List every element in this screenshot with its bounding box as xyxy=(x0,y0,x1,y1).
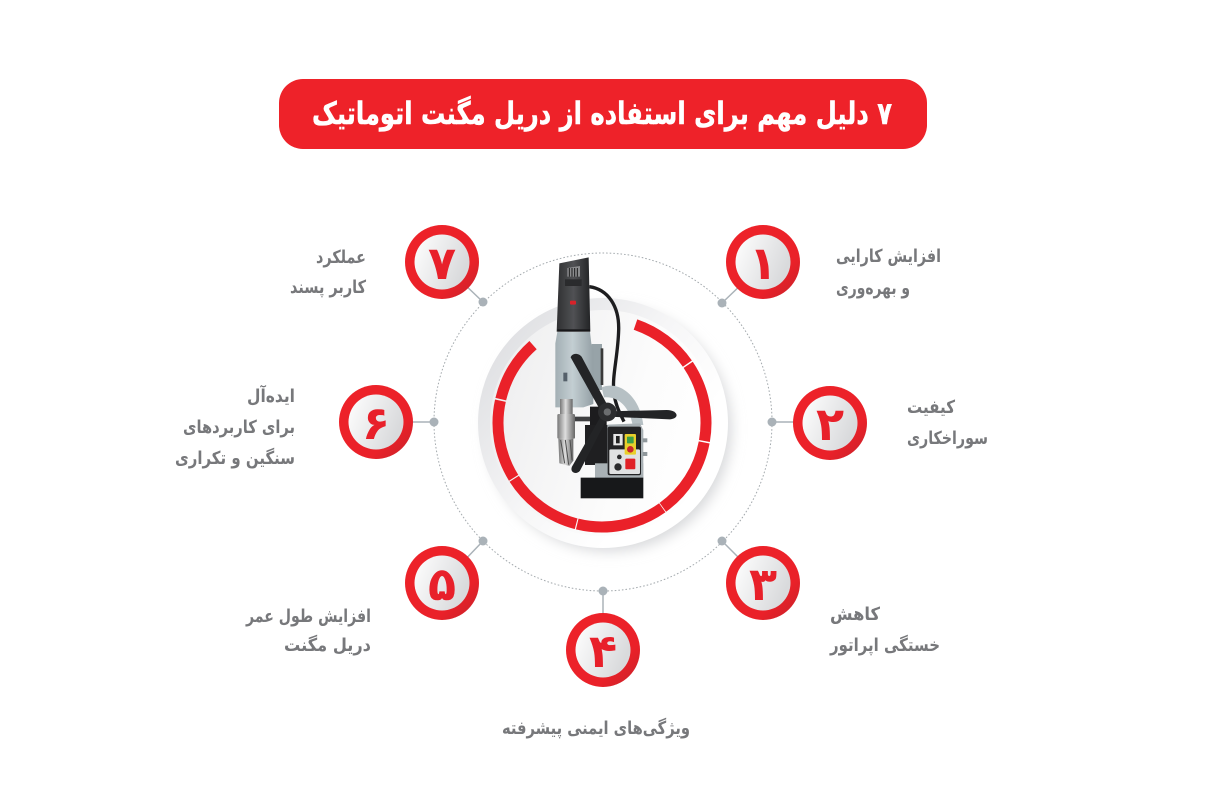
title text: ۷ دلیل مهم برای استفاده از دریل مگنت اتوماتیک xyxy=(312,95,892,132)
label 6: سنگین و تکراری xyxy=(175,447,295,469)
label 3 xyxy=(829,604,940,656)
cutter xyxy=(558,439,573,466)
dotted orbit circle xyxy=(434,253,772,591)
label 3: خستگی اپراتور xyxy=(829,634,940,656)
reason 6 xyxy=(175,384,438,469)
feed handles xyxy=(571,354,677,473)
badge 4: ۴ xyxy=(589,624,617,678)
label 6: برای کاربردهای xyxy=(183,417,295,438)
arch guard xyxy=(602,386,643,425)
arm and rack xyxy=(592,344,602,390)
magnetic drill illustration xyxy=(555,257,677,498)
red segmented ring xyxy=(457,278,747,568)
label 5: افزایش طول عمر xyxy=(245,606,371,627)
label 2: سوراخکاری xyxy=(907,428,988,449)
badge 3 xyxy=(726,546,800,620)
label 2 xyxy=(907,397,988,449)
reason 7 xyxy=(290,225,488,306)
label 1: افزایش کارایی xyxy=(836,246,941,267)
badge 5 xyxy=(405,546,479,620)
label 6 xyxy=(175,384,295,469)
label 6: ایده‌آل xyxy=(247,384,295,407)
badge 7: ۷ xyxy=(428,236,456,290)
body xyxy=(555,332,593,407)
badge 3: ۳ xyxy=(749,557,777,611)
badge 5: ۵ xyxy=(428,557,456,611)
motor housing xyxy=(557,257,590,332)
badge 2: ۲ xyxy=(816,397,844,451)
label 5: دریل مگنت xyxy=(284,634,371,656)
central disc xyxy=(478,298,731,551)
reason 2 xyxy=(768,386,988,460)
label 7 xyxy=(290,247,366,298)
red button xyxy=(625,459,635,469)
badge 4 xyxy=(566,613,640,687)
reason 5 xyxy=(245,536,488,656)
reason 4 xyxy=(502,586,690,739)
label 1: و بهره‌وری xyxy=(836,278,910,299)
badge 7 xyxy=(405,225,479,299)
label 4: ویژگی‌های ایمنی پیشرفته xyxy=(502,717,690,739)
cable xyxy=(589,287,624,422)
lower casting xyxy=(595,463,643,478)
switch panel yellow xyxy=(625,434,636,455)
label 7: عملکرد xyxy=(316,247,366,268)
badge 2 xyxy=(793,386,867,460)
mount column xyxy=(590,407,607,427)
badge 6 xyxy=(339,385,413,459)
label 5 xyxy=(245,606,371,656)
label 7: کاربر پسند xyxy=(290,277,366,298)
magnet base xyxy=(581,478,643,498)
chuck xyxy=(557,414,575,439)
badge 1 xyxy=(726,225,800,299)
badge 6: ۶ xyxy=(362,396,390,450)
title banner xyxy=(279,79,927,149)
label 3: کاهش xyxy=(830,604,880,625)
label 2: کیفیت xyxy=(907,397,955,418)
reason 3 xyxy=(718,536,940,656)
spindle xyxy=(560,399,573,414)
badge 1: ۱ xyxy=(749,236,777,290)
reason 1 xyxy=(718,225,941,308)
control box xyxy=(607,423,643,478)
label 1 xyxy=(836,246,941,299)
